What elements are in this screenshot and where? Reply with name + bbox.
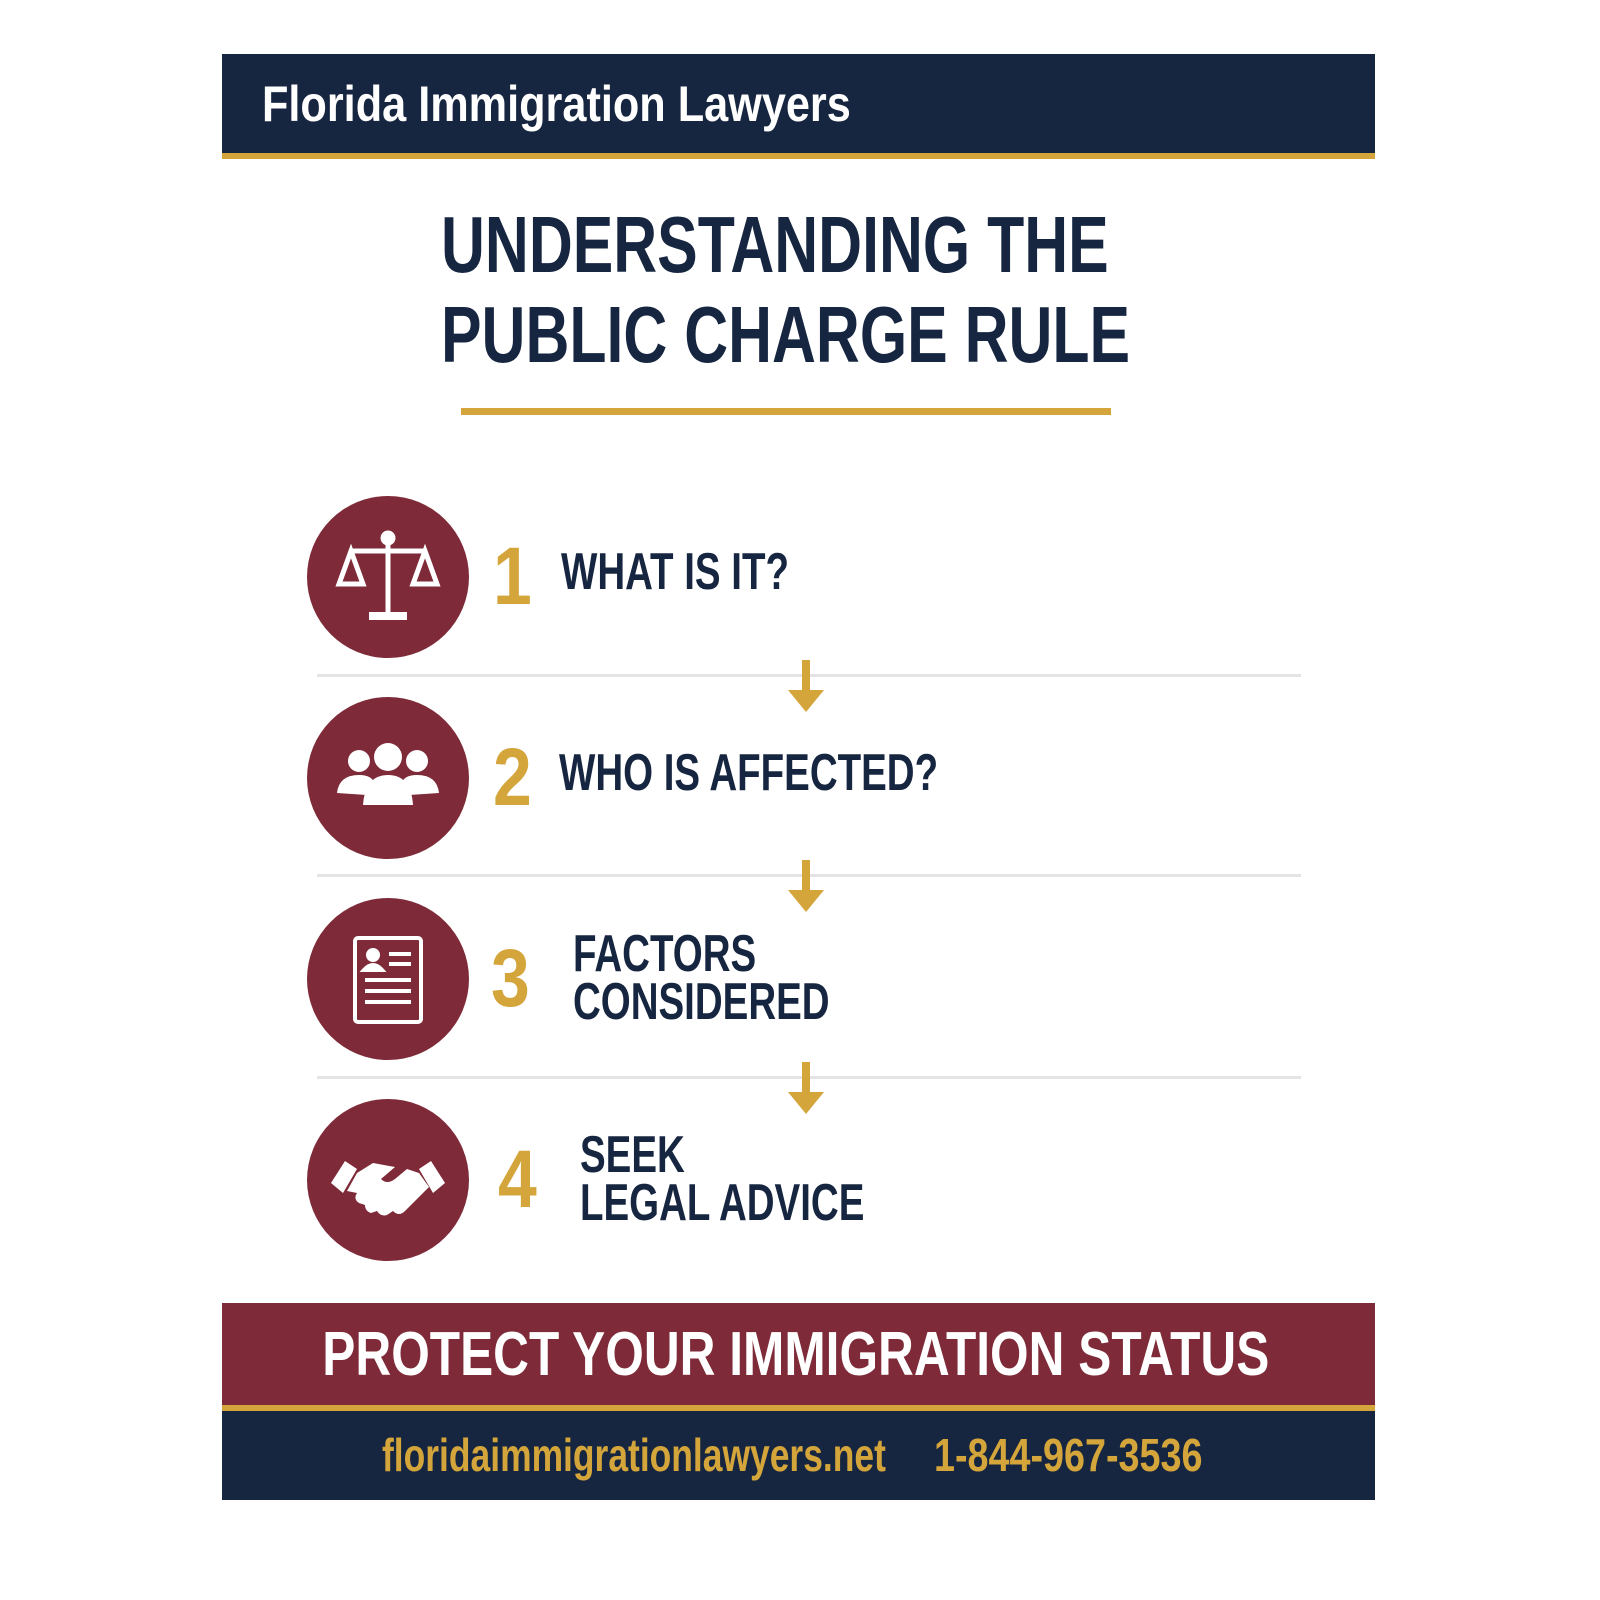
header bar <box>222 54 1375 153</box>
label: WHO IS AFFECTED? <box>559 744 938 802</box>
icon: people <box>307 697 469 859</box>
step 1 <box>307 496 789 658</box>
icon: handshake <box>307 1099 469 1261</box>
arrow 2 <box>788 860 824 912</box>
number 2: 2 <box>493 732 532 823</box>
footer red banner <box>222 1303 1375 1405</box>
icon: scales <box>307 496 469 658</box>
banner text: PROTECT YOUR IMMIGRATION STATUS <box>322 1320 1269 1389</box>
number 4: 4 <box>498 1134 537 1225</box>
label: WHAT IS IT? <box>561 543 789 601</box>
label: CONSIDERED <box>573 973 830 1031</box>
icon: document <box>307 898 469 1060</box>
step 2 <box>307 697 938 859</box>
label <box>580 1126 864 1232</box>
label <box>573 925 830 1031</box>
header text: Florida Immigration Lawyers <box>262 76 851 132</box>
title underline <box>461 408 1111 415</box>
arrow 3 <box>788 1062 824 1114</box>
title: UNDERSTANDING THE <box>441 200 1109 289</box>
number 1: 1 <box>493 531 532 622</box>
phone: 1-844-967-3536 <box>934 1429 1202 1481</box>
label: SEEK <box>580 1126 685 1184</box>
footer contact bar <box>222 1411 1375 1500</box>
step 3 <box>307 898 830 1060</box>
title <box>441 200 1130 379</box>
header gold rule <box>222 153 1375 159</box>
number 3: 3 <box>491 933 530 1024</box>
website: floridaimmigrationlawyers.net <box>382 1429 886 1481</box>
label: FACTORS <box>573 925 756 983</box>
arrow 1 <box>788 660 824 712</box>
step 4 <box>307 1099 864 1261</box>
title: PUBLIC CHARGE RULE <box>441 290 1130 379</box>
label: LEGAL ADVICE <box>580 1174 864 1232</box>
footer gold rule <box>222 1405 1375 1411</box>
